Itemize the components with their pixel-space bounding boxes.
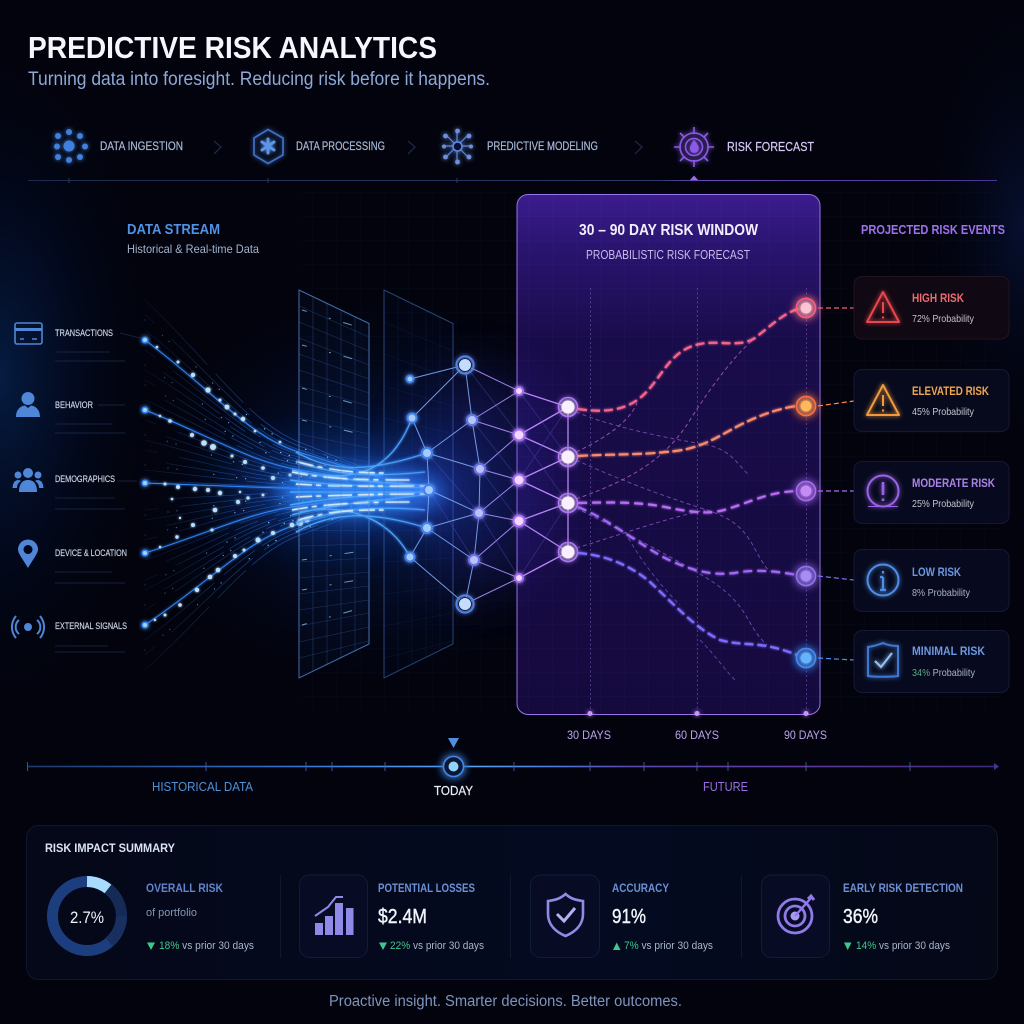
- thin branch lines: [576, 340, 770, 680]
- metric: accuracy: 7% vs prior 30 days: [624, 940, 713, 952]
- metric: early risk detection: EARLY RISK DETECTION: [843, 881, 963, 895]
- panel: 30-90 day risk window: [517, 194, 820, 716]
- metric: accuracy: ACCURACY: [612, 881, 669, 895]
- metric: potential losses: [300, 875, 484, 958]
- label: data ingestion: DATA INGESTION: [100, 139, 183, 153]
- metric: potential losses: $2.4M: [378, 906, 427, 928]
- main fiber lines: [145, 340, 430, 625]
- donut chart: [52, 882, 122, 950]
- large nodes: [456, 356, 474, 613]
- arrow: [635, 141, 642, 154]
- forecast start nodes: [558, 398, 578, 562]
- card: high risk: [854, 276, 1009, 339]
- arrow: [214, 141, 221, 154]
- icon: predictive modeling: [442, 129, 473, 164]
- source: external signals: EXTERNAL SIGNALS: [55, 621, 127, 631]
- converging core: [275, 418, 445, 557]
- card: elevated risk: [854, 370, 1009, 432]
- icon: data ingestion: [54, 129, 88, 163]
- footer tagline: Proactive insight. Smarter decisions. Better outcomes.: [329, 993, 682, 1010]
- particles: [154, 346, 310, 621]
- blue nodes: [406, 376, 485, 565]
- card: low risk: LOW RISK: [912, 565, 961, 579]
- card: moderate risk: MODERATE RISK: [912, 476, 995, 490]
- metric: potential losses: 22% vs prior 30 days: [390, 940, 484, 952]
- metric: accuracy: [530, 875, 713, 958]
- forecast day labels: 90 DAYS: [784, 728, 827, 742]
- panel heading: 30 – 90 DAY RISK WINDOW: [579, 222, 758, 239]
- card: high risk: 72% Probability: [912, 313, 975, 325]
- trajectory: low risk: [578, 507, 797, 575]
- card: high risk: HIGH RISK: [912, 291, 964, 305]
- marker: [690, 176, 698, 180]
- trajectory: elevated risk: [578, 406, 797, 456]
- process pipeline: [28, 127, 997, 183]
- donut chart: 2.7%: [70, 909, 104, 927]
- arrow: [408, 141, 415, 154]
- card: low risk: 8% Probability: [912, 587, 971, 599]
- metric: early risk detection: 36%: [843, 906, 878, 928]
- forecast day labels: [567, 728, 827, 742]
- summary heading: RISK IMPACT SUMMARY: [45, 841, 175, 855]
- card: elevated risk: ELEVATED RISK: [912, 384, 989, 398]
- data stream heading: Historical & Real-time Data: [127, 242, 259, 256]
- end nodes: [796, 298, 816, 668]
- trajectory: high risk: [578, 309, 798, 411]
- forecast day labels: 60 DAYS: [675, 728, 719, 742]
- source: external signals: [12, 616, 127, 638]
- forecast day markers: [588, 288, 808, 716]
- metric: overall risk: OVERALL RISK: [146, 881, 223, 895]
- purple nodes: [514, 387, 524, 582]
- pipeline rule: [28, 180, 997, 181]
- source nodes: [142, 337, 148, 628]
- card: moderate risk: [854, 462, 1009, 524]
- card: elevated risk: 45% Probability: [912, 406, 975, 418]
- metric: potential losses: POTENTIAL LOSSES: [378, 881, 475, 895]
- metric: early risk detection: [762, 875, 963, 958]
- data stream heading: [127, 221, 259, 256]
- data sources: [12, 323, 148, 652]
- card: moderate risk: 25% Probability: [912, 498, 975, 510]
- neural network: [406, 356, 578, 613]
- arrow tip: [994, 763, 999, 770]
- today marker: [444, 756, 464, 776]
- icon: data processing: [254, 130, 283, 164]
- connectors to cards: [818, 308, 854, 660]
- today pointer: [448, 738, 459, 748]
- card: minimal risk: MINIMAL RISK: [912, 644, 985, 658]
- icon: bar chart: [315, 897, 354, 935]
- card: minimal risk: 34% Probability: [912, 667, 976, 679]
- card: minimal risk: [854, 630, 1009, 692]
- metric: overall risk: of portfolio: [146, 907, 197, 919]
- source: transactions: TRANSACTIONS: [55, 328, 113, 338]
- subtitle: Turning data into foresight. Reducing risk before it happens.: [28, 68, 490, 90]
- trajectory: moderate risk: [578, 491, 797, 512]
- panel: risk impact summary: [26, 826, 998, 980]
- source: demographics: DEMOGRAPHICS: [55, 474, 115, 484]
- icon: target: [778, 896, 814, 933]
- panel subheading: PROBABILISTIC RISK FORECAST: [586, 248, 750, 262]
- trajectory: minimal risk: [578, 553, 797, 655]
- source: behavior: [16, 392, 93, 417]
- data planes: [299, 290, 453, 678]
- metric: overall risk: [52, 881, 254, 952]
- source: device and location: [18, 539, 127, 568]
- data stream fibers: [145, 300, 470, 670]
- forecast day labels: 30 DAYS: [567, 728, 611, 742]
- source: device and location: DEVICE & LOCATION: [55, 548, 127, 558]
- label: risk forecast: RISK FORECAST: [727, 140, 814, 154]
- card: low risk: [854, 550, 1009, 612]
- label: predictive modeling: PREDICTIVE MODELING: [487, 139, 598, 153]
- source: behavior: BEHAVIOR: [55, 400, 93, 410]
- source: transactions: [15, 323, 113, 344]
- title: PREDICTIVE RISK ANALYTICS: [28, 30, 437, 65]
- metric: accuracy: 91%: [612, 906, 646, 928]
- data stream heading: DATA STREAM: [127, 221, 220, 238]
- timeline: TODAY: [434, 783, 473, 798]
- metric: overall risk: 18% vs prior 30 days: [159, 940, 254, 952]
- network edges: [410, 365, 568, 604]
- forecast trajectories: [576, 308, 854, 680]
- source: demographics: [12, 468, 115, 492]
- timeline: [28, 738, 999, 798]
- icon: risk forecast: [674, 127, 714, 167]
- label: data processing: DATA PROCESSING: [296, 139, 385, 153]
- icon: shield: [548, 894, 583, 936]
- pipeline ticks: [69, 178, 457, 183]
- metric: early risk detection: 14% vs prior 30 days: [856, 940, 950, 952]
- timeline: FUTURE: [703, 779, 748, 794]
- timeline labels: HISTORICAL DATA: [152, 779, 253, 794]
